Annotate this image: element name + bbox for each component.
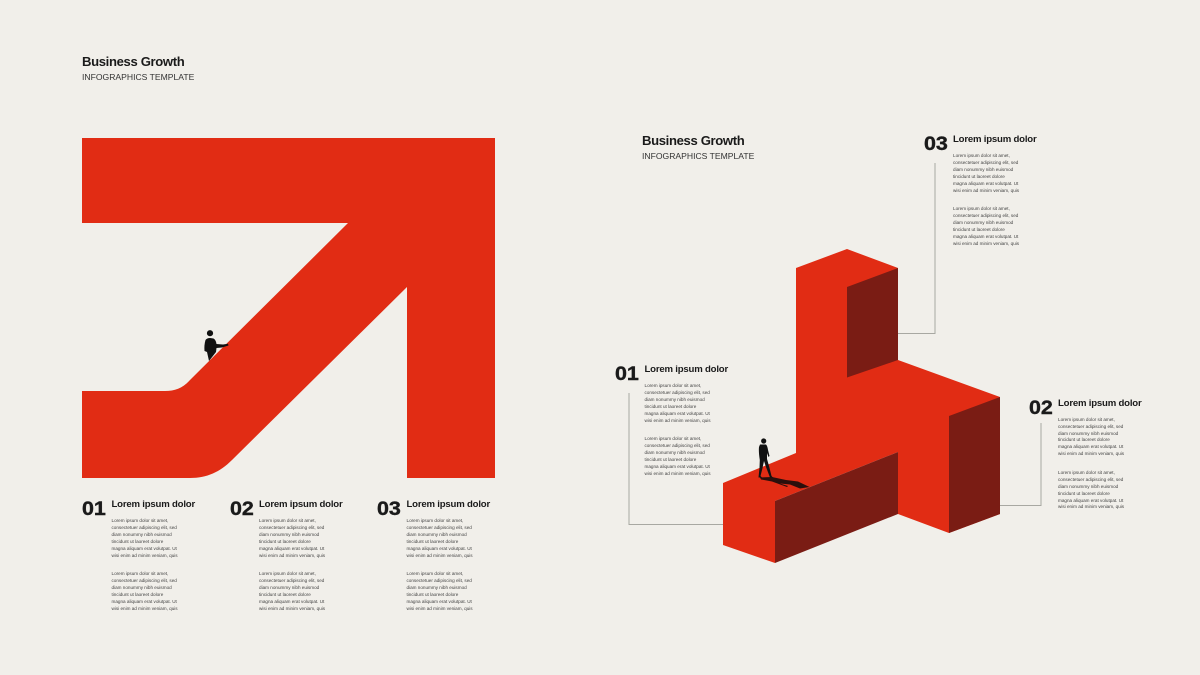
body text 02 paragraph 2: tincidunt ut laoreet dolore bbox=[1058, 491, 1110, 496]
heading 03: Lorem ipsum dolor bbox=[953, 134, 1036, 145]
body text 03 paragraph 2: consectetuer adipiscing elit, sed bbox=[953, 213, 1018, 218]
body text 02 paragraph 1: diam nonummy nibh euismod bbox=[259, 532, 319, 537]
body text 01 paragraph 1: diam nonummy nibh euismod bbox=[644, 397, 705, 402]
icon: climbing person silhouette bbox=[204, 330, 228, 361]
body text 01 paragraph 2: wisi enim ad minim veniam, quis bbox=[112, 606, 178, 611]
body text 02 paragraph 2: magna aliquam erat volutpat. Ut bbox=[259, 599, 324, 604]
body text 01 paragraph 2: wisi enim ad minim veniam, quis bbox=[644, 471, 711, 476]
body text 01 paragraph 2: Lorem ipsum dolor sit amet, bbox=[112, 571, 168, 576]
right callout 02 bbox=[1028, 396, 1142, 509]
body text 01 paragraph 2 bbox=[112, 571, 178, 611]
dark face right bbox=[949, 397, 1000, 533]
heading 02: Lorem ipsum dolor bbox=[1058, 398, 1141, 408]
body text 02 paragraph 2 bbox=[1058, 470, 1124, 509]
right panel title: Business Growth bbox=[642, 133, 744, 148]
body text 03 paragraph 1: wisi enim ad minim veniam, quis bbox=[953, 188, 1019, 193]
body text 03 paragraph 2: magna aliquam erat volutpat. Ut bbox=[406, 599, 472, 604]
body text 02 paragraph 1: Lorem ipsum dolor sit amet, bbox=[1058, 417, 1115, 422]
number 02: 02 bbox=[230, 498, 253, 520]
body text 03 paragraph 2 bbox=[953, 206, 1019, 246]
dark face upper bbox=[847, 268, 898, 378]
body text 03 paragraph 2: wisi enim ad minim veniam, quis bbox=[406, 606, 473, 611]
body text 02 paragraph 1 bbox=[1058, 417, 1124, 456]
body text 01 paragraph 1: magna aliquam erat volutpat. Ut bbox=[112, 546, 177, 551]
left panel title: INFOGRAPHICS TEMPLATE bbox=[82, 72, 194, 82]
body text 01 paragraph 1: consectetuer adipiscing elit, sed bbox=[112, 525, 177, 530]
connector line 03 bbox=[898, 163, 935, 334]
body text 01 paragraph 2: diam nonummy nibh euismod bbox=[112, 585, 172, 590]
number 02: 02 bbox=[1028, 396, 1052, 418]
body text 02 paragraph 1: magna aliquam erat volutpat. Ut bbox=[259, 546, 324, 551]
body text 03 paragraph 2: wisi enim ad minim veniam, quis bbox=[953, 241, 1019, 246]
body text 02 paragraph 1: tincidunt ut laoreet dolore bbox=[1058, 437, 1110, 442]
body text 02 paragraph 2: wisi enim ad minim veniam, quis bbox=[259, 606, 325, 611]
body text 03 paragraph 2: diam nonummy nibh euismod bbox=[406, 585, 467, 590]
body text 03 paragraph 2: Lorem ipsum dolor sit amet, bbox=[953, 206, 1010, 211]
body text 01 paragraph 1: magna aliquam erat volutpat. Ut bbox=[644, 411, 710, 416]
body text 03 paragraph 1: magna aliquam erat volutpat. Ut bbox=[953, 181, 1018, 186]
body text 02 paragraph 1: Lorem ipsum dolor sit amet, bbox=[259, 518, 316, 523]
body text 01 paragraph 2: tincidunt ut laoreet dolore bbox=[644, 457, 696, 462]
body text 01 paragraph 1: tincidunt ut laoreet dolore bbox=[644, 404, 696, 409]
heading 01: Lorem ipsum dolor bbox=[644, 364, 728, 375]
body text 01 paragraph 1: tincidunt ut laoreet dolore bbox=[112, 539, 163, 544]
body text 03 paragraph 1: diam nonummy nibh euismod bbox=[406, 532, 467, 537]
right callout 01 bbox=[615, 363, 728, 476]
graphic: red growth arrow with climbing figure bbox=[82, 138, 495, 478]
number 01: 01 bbox=[82, 498, 106, 520]
left panel title bbox=[82, 54, 194, 82]
body text 01 paragraph 1: wisi enim ad minim veniam, quis bbox=[644, 418, 711, 423]
body text 01 paragraph 2: magna aliquam erat volutpat. Ut bbox=[112, 599, 177, 604]
body text 01 paragraph 1: Lorem ipsum dolor sit amet, bbox=[112, 518, 168, 523]
body text 03 paragraph 2: magna aliquam erat volutpat. Ut bbox=[953, 234, 1018, 239]
body text 01 paragraph 2: consectetuer adipiscing elit, sed bbox=[644, 443, 710, 448]
body text 02 paragraph 2: magna aliquam erat volutpat. Ut bbox=[1058, 498, 1123, 503]
isometric block red faces bbox=[723, 249, 1000, 563]
left column item 02 bbox=[230, 498, 343, 611]
arrow shape bbox=[82, 138, 495, 478]
body text 02 paragraph 2: tincidunt ut laoreet dolore bbox=[259, 592, 311, 597]
body text 01 paragraph 1: wisi enim ad minim veniam, quis bbox=[112, 553, 178, 558]
number 03: 03 bbox=[377, 498, 401, 520]
body text 02 paragraph 2: consectetuer adipiscing elit, sed bbox=[259, 578, 324, 583]
body text 02 paragraph 2: diam nonummy nibh euismod bbox=[259, 585, 319, 590]
right callout 03 bbox=[924, 133, 1037, 246]
body text 03 paragraph 1 bbox=[953, 153, 1019, 193]
body text 02 paragraph 2: consectetuer adipiscing elit, sed bbox=[1058, 477, 1123, 482]
body text 02 paragraph 1: tincidunt ut laoreet dolore bbox=[259, 539, 311, 544]
body text 01 paragraph 1: diam nonummy nibh euismod bbox=[112, 532, 172, 537]
right panel title: INFOGRAPHICS TEMPLATE bbox=[642, 151, 754, 161]
number 03: 03 bbox=[924, 133, 947, 155]
body text 02 paragraph 1: wisi enim ad minim veniam, quis bbox=[259, 553, 325, 558]
body text 03 paragraph 2: Lorem ipsum dolor sit amet, bbox=[406, 571, 463, 576]
heading 01: Lorem ipsum dolor bbox=[112, 499, 195, 510]
icon: walking person silhouette bbox=[758, 438, 773, 478]
left panel title: Business Growth bbox=[82, 54, 184, 69]
body text 03 paragraph 2: tincidunt ut laoreet dolore bbox=[953, 227, 1005, 232]
body text 02 paragraph 1: magna aliquam erat volutpat. Ut bbox=[1058, 444, 1123, 449]
body text 03 paragraph 1: wisi enim ad minim veniam, quis bbox=[406, 553, 473, 558]
body text 03 paragraph 1: tincidunt ut laoreet dolore bbox=[406, 539, 458, 544]
body text 02 paragraph 2: Lorem ipsum dolor sit amet, bbox=[259, 571, 316, 576]
connector line 01 bbox=[629, 393, 723, 524]
graphic: isometric red block with connectors bbox=[628, 163, 1042, 563]
heading 03: Lorem ipsum dolor bbox=[406, 499, 490, 510]
left column item 01 bbox=[82, 498, 196, 611]
body text 03 paragraph 2: diam nonummy nibh euismod bbox=[953, 220, 1013, 225]
body text 02 paragraph 2: Lorem ipsum dolor sit amet, bbox=[1058, 470, 1115, 475]
body text 02 paragraph 1 bbox=[259, 518, 325, 558]
number 01: 01 bbox=[615, 363, 639, 385]
body text 03 paragraph 1: magna aliquam erat volutpat. Ut bbox=[406, 546, 472, 551]
body text 01 paragraph 2: magna aliquam erat volutpat. Ut bbox=[644, 464, 710, 469]
body text 03 paragraph 1: consectetuer adipiscing elit, sed bbox=[406, 525, 472, 530]
body text 01 paragraph 2: Lorem ipsum dolor sit amet, bbox=[644, 436, 701, 441]
body text 02 paragraph 1: diam nonummy nibh euismod bbox=[1058, 430, 1118, 436]
heading 02: Lorem ipsum dolor bbox=[259, 499, 342, 510]
body text 02 paragraph 1: consectetuer adipiscing elit, sed bbox=[259, 525, 324, 530]
body text 01 paragraph 1: consectetuer adipiscing elit, sed bbox=[644, 390, 710, 395]
body text 01 paragraph 2: tincidunt ut laoreet dolore bbox=[112, 592, 163, 597]
left column item 03 bbox=[377, 498, 490, 611]
body text 01 paragraph 2: consectetuer adipiscing elit, sed bbox=[112, 578, 177, 583]
body text 01 paragraph 1 bbox=[644, 383, 711, 423]
right panel title bbox=[642, 133, 754, 161]
body text 01 paragraph 2: diam nonummy nibh euismod bbox=[644, 450, 705, 455]
body text 01 paragraph 1 bbox=[112, 518, 178, 558]
body text 01 paragraph 2 bbox=[644, 436, 711, 476]
body text 03 paragraph 1: consectetuer adipiscing elit, sed bbox=[953, 160, 1018, 165]
body text 02 paragraph 2: diam nonummy nibh euismod bbox=[1058, 484, 1118, 489]
body text 03 paragraph 1: Lorem ipsum dolor sit amet, bbox=[953, 153, 1010, 158]
body text 02 paragraph 2 bbox=[259, 571, 325, 611]
body text 03 paragraph 1: tincidunt ut laoreet dolore bbox=[953, 174, 1005, 179]
body text 02 paragraph 2: wisi enim ad minim veniam, quis bbox=[1058, 504, 1124, 509]
body text 02 paragraph 1: wisi enim ad minim veniam, quis bbox=[1058, 451, 1124, 456]
body text 03 paragraph 1: diam nonummy nibh euismod bbox=[953, 167, 1013, 172]
body text 03 paragraph 2: consectetuer adipiscing elit, sed bbox=[406, 578, 472, 583]
body text 02 paragraph 1: consectetuer adipiscing elit, sed bbox=[1058, 424, 1123, 429]
body text 03 paragraph 1: Lorem ipsum dolor sit amet, bbox=[406, 518, 463, 523]
dark face front bbox=[775, 452, 898, 563]
body text 01 paragraph 1: Lorem ipsum dolor sit amet, bbox=[644, 383, 701, 388]
figure shadow bbox=[760, 477, 810, 488]
body text 03 paragraph 2: tincidunt ut laoreet dolore bbox=[406, 592, 458, 597]
connector line 02 bbox=[1000, 423, 1041, 506]
body text 03 paragraph 2 bbox=[406, 571, 473, 611]
body text 03 paragraph 1 bbox=[406, 518, 473, 558]
